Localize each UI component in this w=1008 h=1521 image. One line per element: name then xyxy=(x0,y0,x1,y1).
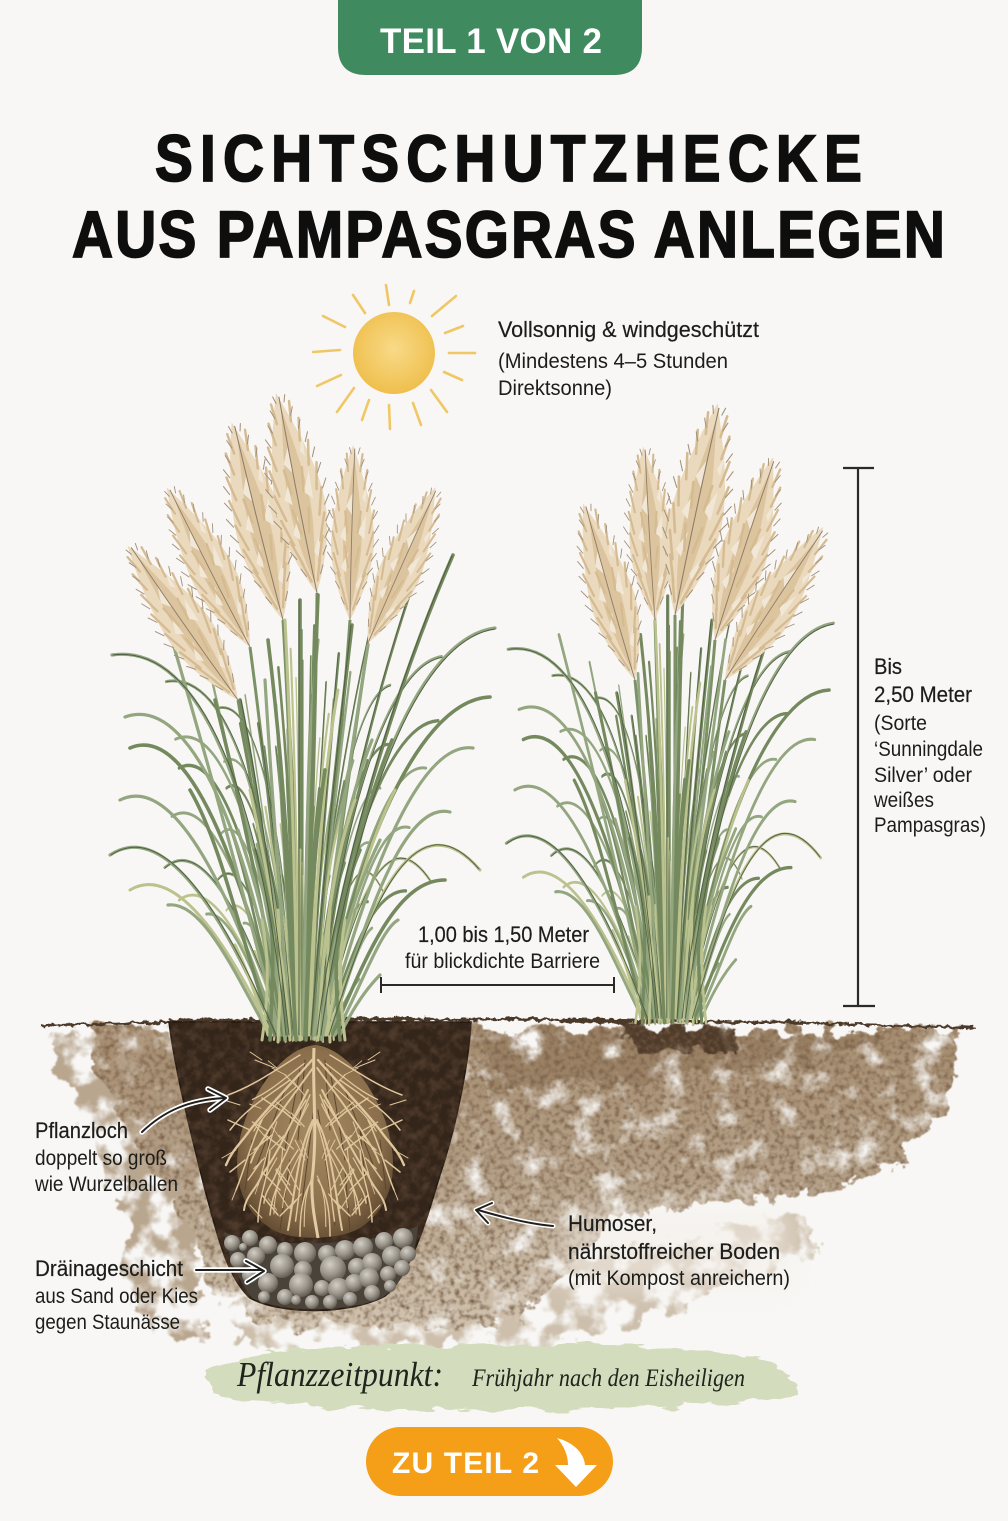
text: height: weißes xyxy=(873,789,934,812)
left plant stems xyxy=(238,593,368,1030)
arrow: Drainage xyxy=(196,1261,264,1282)
text: Drainage: Dräinageschicht xyxy=(35,1256,183,1281)
title: SICHTSCHUTZHECKE xyxy=(155,122,862,196)
text: sun requirement: Direktsonne) xyxy=(498,377,612,400)
plant: right pampas grass xyxy=(506,397,848,1025)
text: plant spacing: 1,00 bis 1,50 Meter xyxy=(418,922,589,947)
text: plant spacing xyxy=(405,922,600,973)
text: height: Silver’ oder xyxy=(874,764,972,787)
text: Drainage: aus Sand oder Kies xyxy=(35,1285,198,1308)
planting time brush stroke: Frühjahr nach den Eisheiligen xyxy=(471,1365,745,1392)
dark root texture xyxy=(245,1060,386,1230)
root ball xyxy=(222,1045,408,1238)
ground line xyxy=(42,1019,975,1028)
button: zu Teil 2: ZU TEIL 2 xyxy=(392,1447,539,1480)
text: sun requirement: (Mindestens 4–5 Stunden xyxy=(498,350,728,373)
text: Drainage: gegen Staunässe xyxy=(35,1311,180,1334)
right plant stems xyxy=(635,615,725,1015)
light roots xyxy=(222,1048,408,1238)
text: soil: (mit Kompost anreichern) xyxy=(568,1267,790,1290)
plant: left pampas grass xyxy=(106,387,495,1042)
arrow: Pflanzloch xyxy=(142,1089,226,1132)
text: sun requirement: Vollsonnig & windgeschützt xyxy=(498,317,759,342)
text: soil: nährstoffreicher Boden xyxy=(568,1239,780,1264)
height marker xyxy=(843,468,875,1006)
text: sun requirement xyxy=(498,317,759,400)
right plant blades xyxy=(506,552,834,1025)
text: soil: Humoser, xyxy=(568,1211,657,1236)
text: plant spacing: für blickdichte Barriere xyxy=(405,950,600,973)
text: Pflanzloch: Pflanzloch xyxy=(35,1118,128,1143)
text: height: Bis xyxy=(874,654,902,679)
button: zu Teil 2 xyxy=(366,1427,613,1496)
planting hole xyxy=(169,1022,471,1311)
right plant plumes xyxy=(558,397,848,695)
text: Pflanzloch: wie Wurzelballen xyxy=(34,1173,178,1196)
spacing marker xyxy=(381,977,614,993)
arrow: soil xyxy=(476,1203,553,1226)
title: AUS PAMPASGRAS ANLEGEN xyxy=(72,198,945,272)
icon: sun xyxy=(313,285,475,429)
planting time brush stroke xyxy=(208,1344,797,1410)
banner: Teil 1 von 2: TEIL 1 VON 2 xyxy=(380,22,602,61)
planting time brush stroke: Pflanzzeitpunkt: xyxy=(236,1355,443,1394)
text: height xyxy=(873,654,986,837)
text: height: 2,50 Meter xyxy=(874,682,972,707)
title xyxy=(72,122,945,272)
text: height: (Sorte xyxy=(874,712,927,735)
text: soil xyxy=(568,1211,790,1290)
text: Drainage xyxy=(35,1256,198,1334)
text: height: ‘Sunningdale xyxy=(874,738,983,761)
banner: Teil 1 von 2 xyxy=(338,0,642,75)
left plant plumes xyxy=(106,387,460,716)
text: Pflanzloch: doppelt so groß xyxy=(35,1147,167,1170)
drainage gravel layer xyxy=(224,1226,418,1309)
text: Pflanzloch xyxy=(34,1118,178,1196)
soil xyxy=(50,1026,960,1345)
left plant blades xyxy=(110,555,495,1042)
text: height: Pampasgras) xyxy=(874,814,986,837)
icon: curved down arrow xyxy=(555,1438,597,1487)
